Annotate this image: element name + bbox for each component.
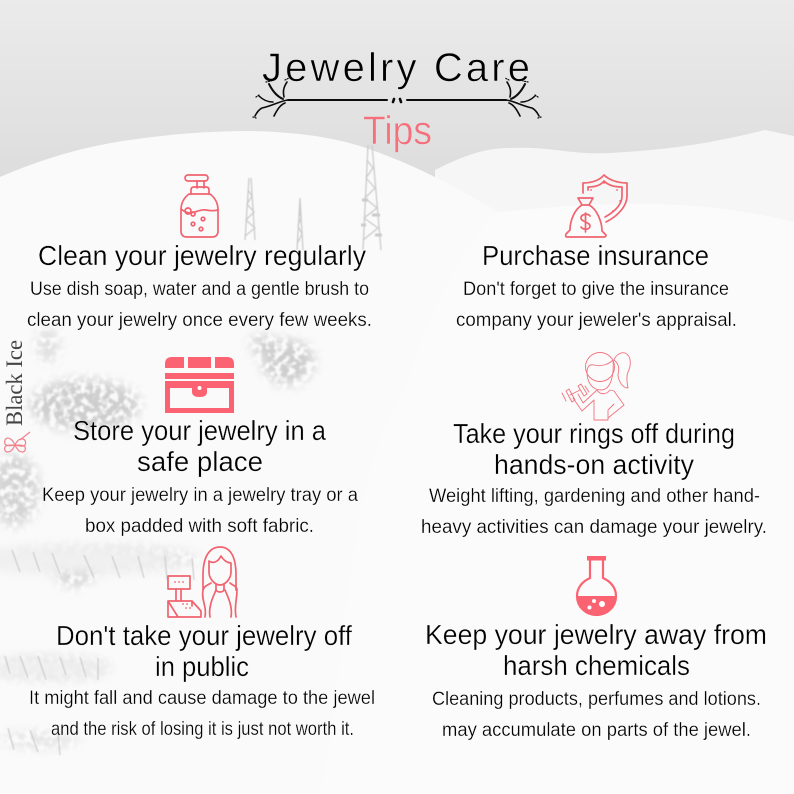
heading: Take your rings off during bbox=[453, 418, 735, 449]
soft shading bbox=[0, 546, 180, 678]
logo: Black Ice bbox=[2, 340, 30, 452]
text block bbox=[421, 485, 767, 538]
icon: clover bbox=[5, 432, 30, 452]
text block: Weight lifting, gardening and other hand- bbox=[429, 485, 760, 507]
heading: Don't take your jewelry off bbox=[56, 620, 352, 651]
text block: Keep your jewelry in a jewelry tray or a bbox=[42, 484, 358, 506]
heading bbox=[453, 418, 735, 480]
trees bbox=[0, 327, 314, 748]
heading: safe place bbox=[137, 446, 263, 477]
text block: It might fall and cause damage to the jewel bbox=[29, 687, 375, 709]
ornament: branch divider bbox=[253, 78, 541, 118]
logo: Black Ice: Black Ice bbox=[2, 340, 27, 426]
heading: Purchase insurance bbox=[482, 240, 709, 271]
heading: harsh chemicals bbox=[503, 650, 690, 681]
panel: clean your jewelry bbox=[27, 175, 372, 331]
text block: Cleaning products, perfumes and lotions. bbox=[432, 688, 761, 710]
text block: may accumulate on parts of the jewel. bbox=[442, 719, 751, 741]
title: Jewelry Care bbox=[262, 46, 530, 90]
icon: shield and money bag bbox=[566, 175, 627, 237]
panel: don't take jewelry off bbox=[29, 547, 375, 740]
heading bbox=[73, 415, 326, 477]
text block: heavy activities can damage your jewelry. bbox=[421, 516, 767, 538]
icon: cashier bbox=[168, 547, 237, 617]
text block: box padded with soft fabric. bbox=[85, 515, 314, 537]
fences bbox=[5, 550, 194, 755]
text block bbox=[27, 278, 372, 331]
panel: keep away from chemicals bbox=[425, 556, 767, 741]
heading: Keep your jewelry away from bbox=[425, 619, 767, 650]
heading: Store your jewelry in a bbox=[73, 415, 326, 446]
icon: woman with dumbbell bbox=[562, 352, 630, 420]
text block: and the risk of losing it is just not worth it. bbox=[51, 718, 354, 740]
heading bbox=[425, 619, 767, 681]
panel: purchase insurance bbox=[456, 175, 737, 331]
towers bbox=[245, 145, 382, 250]
text block: clean your jewelry once every few weeks. bbox=[27, 309, 372, 331]
title bbox=[253, 46, 541, 118]
icon: soap bottle bbox=[181, 175, 218, 237]
heading: in public bbox=[155, 651, 249, 682]
panel: take rings off bbox=[421, 352, 767, 538]
text block: Don't forget to give the insurance bbox=[463, 278, 729, 300]
text block bbox=[42, 484, 358, 537]
heading: Clean your jewelry regularly bbox=[38, 240, 366, 271]
text block bbox=[432, 688, 761, 741]
icon: treasure chest bbox=[165, 357, 234, 413]
text block bbox=[456, 278, 737, 331]
text block: company your jeweler's appraisal. bbox=[456, 309, 737, 331]
text block: Use dish soap, water and a gentle brush to bbox=[30, 278, 369, 300]
subtitle: Tips: Tips bbox=[363, 109, 432, 153]
heading bbox=[56, 620, 352, 682]
text block bbox=[29, 687, 375, 740]
icon: flask bbox=[577, 556, 616, 616]
panel: store your jewelry bbox=[42, 357, 358, 537]
heading: hands-on activity bbox=[494, 449, 694, 480]
